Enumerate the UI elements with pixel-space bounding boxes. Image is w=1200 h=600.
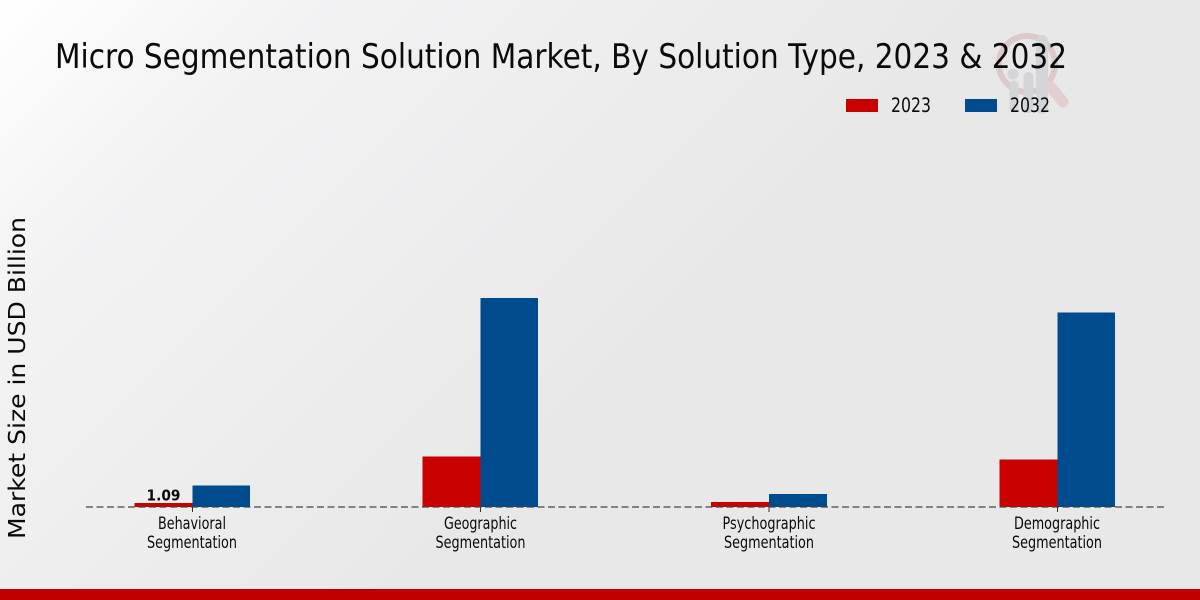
footer bar	[0, 589, 1200, 600]
category label: Geographic Segmentation: Geographic	[444, 514, 517, 533]
category label: Psychographic Segmentation: Segmentation	[724, 533, 814, 552]
category label: Psychographic Segmentation	[722, 514, 816, 552]
category label: Demographic Segmentation	[1012, 514, 1102, 552]
axis baseline	[86, 506, 1164, 508]
legend item: 2032	[965, 94, 1050, 117]
legend item: 2023: 2023	[891, 94, 931, 117]
title: Micro Segmentation Solution Market, By Solution Type, 2023 & 2032	[55, 37, 1067, 76]
legend item: 2023	[846, 94, 931, 117]
legend item: 2032: 2032	[1010, 94, 1050, 117]
y-axis label: Market Size in USD Billion	[3, 217, 31, 539]
legend	[846, 94, 1050, 117]
category label: Behavioral Segmentation	[147, 514, 237, 552]
bars: Demographic Segmentation	[1000, 312, 1115, 507]
category label: Behavioral Segmentation: Segmentation	[147, 533, 237, 552]
bar chart	[86, 298, 1164, 512]
category label: Behavioral Segmentation: Behavioral	[158, 514, 226, 533]
category label: Geographic Segmentation	[436, 514, 526, 552]
category label: Geographic Segmentation: Segmentation	[436, 533, 526, 552]
bars: Behavioral Segmentation	[134, 486, 250, 507]
category label: Psychographic Segmentation: Psychographic	[722, 514, 816, 533]
category label: Demographic Segmentation: Demographic	[1014, 514, 1100, 533]
bars: Psychographic Segmentation	[711, 494, 827, 507]
watermark logo icon	[999, 36, 1063, 108]
bars: Geographic Segmentation	[422, 298, 538, 507]
category label: Demographic Segmentation: Segmentation	[1012, 533, 1102, 552]
data label: 1.09: 1.09	[146, 486, 180, 504]
